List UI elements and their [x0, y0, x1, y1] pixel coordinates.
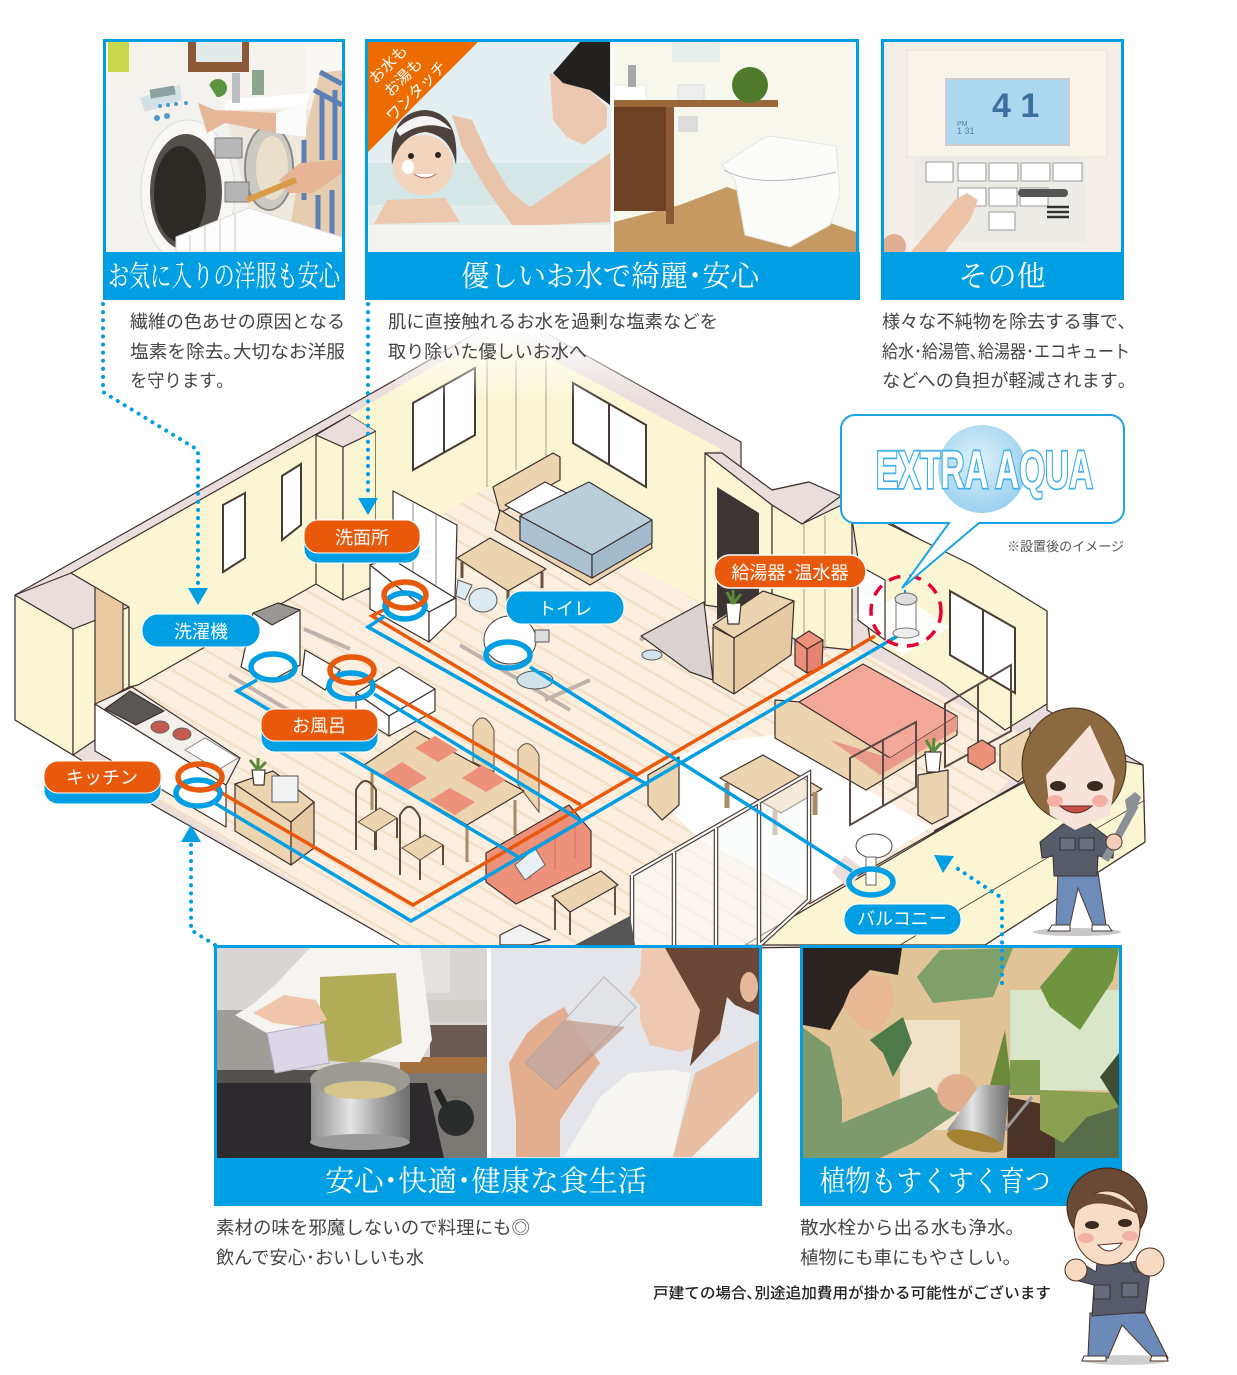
- door: [95, 578, 123, 708]
- water heater: [858, 565, 885, 640]
- dark rug: [575, 916, 635, 945]
- text: gentle water: 取り除いた優しいお水へ: [388, 342, 587, 362]
- filter zone: [854, 595, 949, 656]
- badge: one touch: ワンタッチ: [383, 58, 450, 125]
- lower table: [720, 755, 822, 835]
- label: kitchen: キッチン: [66, 768, 138, 788]
- photo: controller: 1 31: [957, 126, 975, 136]
- bedroom right wall: [487, 325, 723, 605]
- text: laundry: を守ります｡: [130, 371, 225, 391]
- balcony deck: [745, 745, 1145, 945]
- photo: bath: [368, 42, 611, 252]
- bathtub: [356, 667, 435, 736]
- sofa: [486, 805, 591, 904]
- wall vertical lines: [487, 355, 546, 487]
- photo: controller: 4 1: [992, 87, 1039, 125]
- label: bath: お風呂: [292, 716, 346, 736]
- sliding frames: [850, 665, 1011, 825]
- photo: watering: [803, 948, 1119, 1158]
- text: food: 素材の味を邪魔しないので料理にも◎: [216, 1218, 530, 1238]
- label: balcony: [844, 904, 961, 935]
- title: 優しいお水で綺麗･安心: [461, 260, 761, 293]
- tv cabinet: [648, 757, 679, 820]
- text: plants: 散水栓から出る水も浄水｡: [800, 1218, 1015, 1238]
- top fade: [395, 300, 650, 400]
- note: additional cost: 戸建ての場合､別途追加費用が掛かる可能性がございます: [653, 1284, 1051, 1302]
- pipes: [176, 582, 906, 921]
- text: others: 給水･給湯管､給湯器･エコキュート: [882, 342, 1130, 362]
- panel: others: [881, 40, 1124, 300]
- text: plants: 植物にも車にもやさしい｡: [800, 1247, 1012, 1268]
- text: plants: [800, 1218, 1015, 1268]
- label: washing machine: [142, 614, 260, 647]
- fixture rings: [176, 582, 893, 895]
- title: その他: [958, 260, 1046, 293]
- bedroom windows: [413, 368, 646, 487]
- salmon box: [795, 631, 823, 673]
- text: laundry: 塩素を除去｡大切なお洋服: [130, 342, 345, 362]
- balcony sink: [856, 834, 892, 885]
- dotted connector: bath: [358, 304, 378, 515]
- label: kitchen: [44, 761, 161, 804]
- kitchen cabinet: [235, 758, 314, 865]
- storage box: [500, 925, 550, 945]
- low table: [457, 538, 546, 606]
- dotted connector: food: [181, 825, 215, 945]
- entry counter: [713, 590, 794, 694]
- hot water pipes: [215, 607, 875, 905]
- label: water heater: 給湯器･温水器: [732, 563, 848, 583]
- badge: one touch: [366, 42, 478, 152]
- white room floor: [640, 735, 931, 900]
- text: food: 飲んで安心･おいしいも水: [216, 1248, 424, 1268]
- text: others: などへの負担が軽減されます｡: [882, 371, 1127, 391]
- badge: one touch: お水も: [366, 42, 411, 87]
- label: toilet: [506, 591, 624, 624]
- text: food: [216, 1218, 530, 1268]
- title: 植物もすくすく育つ: [820, 1165, 1050, 1198]
- kitchen counter: [95, 687, 240, 827]
- label: washbasin: [304, 520, 420, 563]
- pillar: [316, 415, 376, 600]
- entry tiles: [641, 602, 713, 680]
- text: laundry: [130, 312, 345, 391]
- photo: toilet: [614, 42, 856, 252]
- balcony edge lines: [809, 760, 1145, 945]
- washing machine: [241, 603, 300, 682]
- house illustration: [15, 300, 1145, 952]
- building outline and wall rim: [15, 313, 1145, 952]
- photo: controller: [884, 42, 1121, 252]
- small windows: [223, 464, 301, 572]
- panel: food: [214, 946, 762, 1205]
- title bar: [214, 1158, 762, 1205]
- dining table: [364, 731, 524, 862]
- bedroom left wall: [350, 325, 505, 550]
- label: washbasin: 洗面所: [335, 528, 389, 548]
- vanity unit: [370, 491, 457, 642]
- character: man in work clothes: [1065, 1168, 1169, 1365]
- label: toilet: トイレ: [538, 599, 592, 619]
- photo: drinking: [491, 948, 759, 1158]
- panel: plants: [800, 946, 1122, 1206]
- right bedroom wall: [850, 505, 1047, 730]
- title bar: [366, 252, 860, 300]
- label: bath: [261, 709, 378, 752]
- badge: one touch: お湯も: [381, 55, 426, 100]
- cushions: [456, 580, 497, 612]
- text: laundry: 繊維の色あせの原因となる: [130, 312, 345, 332]
- long left wall: [71, 415, 376, 687]
- dotted connector: plants: [934, 855, 1002, 983]
- filter unit: [893, 593, 919, 638]
- dining chairs back: [473, 718, 539, 812]
- bed 1: [493, 453, 652, 585]
- text: others: 様々な不純物を除去する事で､: [882, 312, 1127, 332]
- label: water heater: [714, 555, 866, 588]
- globe: [938, 425, 1026, 513]
- note: image after install: ※設置後のイメージ: [1007, 539, 1124, 554]
- bedside items: [918, 728, 1030, 824]
- red dashed highlight: [871, 576, 941, 646]
- cold water pipes: [213, 590, 906, 921]
- title: 安心･快適･健康な食生活: [325, 1165, 647, 1198]
- panel: gentle water: [366, 40, 860, 300]
- bed 2: [775, 664, 957, 790]
- title bar: [800, 1158, 1122, 1206]
- concrete pad near balcony: [832, 855, 862, 890]
- dining chairs front: [356, 781, 443, 880]
- label: balcony: バルコニー: [857, 909, 947, 929]
- text: others: [882, 312, 1130, 391]
- right bedroom window: [950, 591, 1015, 693]
- label: washing machine: 洗濯機: [174, 622, 228, 642]
- title bar: [103, 252, 345, 300]
- logo text: EXTRA AQUA: [876, 441, 1093, 500]
- photo: cooking: [217, 948, 487, 1158]
- title: お気に入りの洋服も安心: [108, 260, 341, 293]
- left end wall block: [15, 573, 129, 755]
- glass doors: [632, 773, 809, 945]
- right wall block with door: [705, 453, 852, 650]
- text: gentle water: [388, 312, 718, 362]
- title bar: [881, 252, 1124, 300]
- panel: laundry: [103, 40, 345, 300]
- photo: washing machine: [106, 42, 342, 252]
- character: woman with wrench: [1022, 708, 1141, 936]
- partition strips: [229, 610, 700, 714]
- photo: controller: PM: [957, 121, 968, 128]
- dotted connector: laundry: [103, 304, 208, 605]
- callout: EXTRA AQUA: [841, 415, 1124, 588]
- toilet: [484, 616, 553, 689]
- text: gentle water: 肌に直接触れるお水を過剰な塩素などを: [388, 312, 718, 332]
- shower area: [302, 650, 340, 690]
- coffee table: [552, 871, 618, 935]
- slippers: [642, 650, 662, 660]
- floor: [95, 487, 1045, 945]
